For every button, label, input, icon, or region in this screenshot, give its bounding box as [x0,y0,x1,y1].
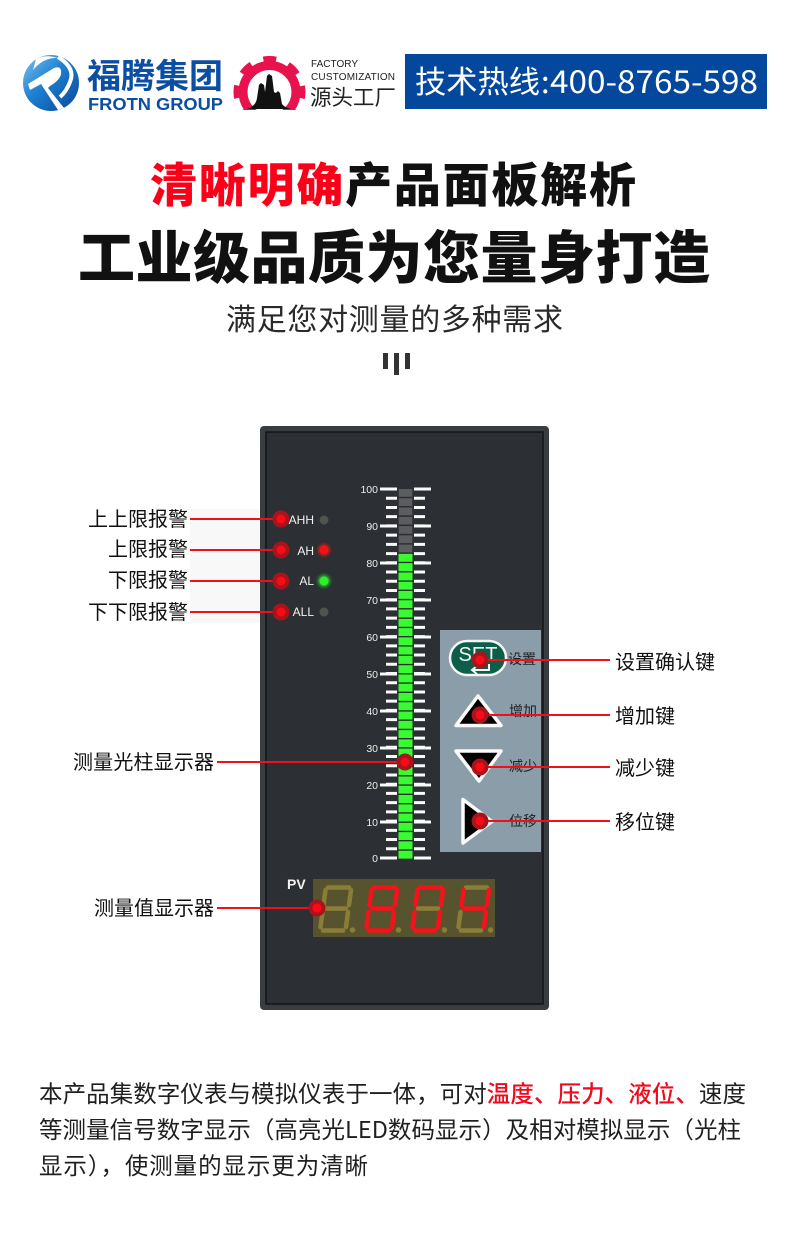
logo: source factory gear: CUSTOMIZATION [311,72,395,83]
alarm indicators: AH [297,544,314,558]
decorative marks [383,353,410,375]
callouts: left: 下限报警 [108,564,188,593]
logo english: FROTN GROUP [88,94,223,114]
digit 1 (unlit) [320,888,355,933]
bar chart: scale numbers: 10 [366,817,378,829]
key labels [508,649,537,831]
title line 2: 工业级品质为您量身打造 [78,213,710,295]
hotline banner [405,54,767,109]
key: down [456,751,501,781]
key: SET: SET [459,644,497,666]
bar chart: scale numbers: 100 [360,484,378,496]
logo: Frotn Group [23,49,223,114]
callouts: right: 增加键 [615,700,675,729]
callouts: left: 测量值显示器 [94,892,214,921]
description text: 本产品集数字仪表与模拟仪表于一体，可对温度、压力、液位、速度 [39,1075,746,1109]
callouts: right: 减少键 [615,752,675,781]
logo name: 福腾集团 [87,49,223,98]
bar chart: scale ticks [380,488,431,858]
hotline banner: 技术热线 [415,57,540,102]
key labels: 位移 [509,811,537,831]
callouts: left [73,503,414,921]
hotline banner: 400-8765-598 [550,57,758,102]
digit 3 [412,888,447,933]
bar chart: scale numbers: 80 [366,558,378,570]
key labels: 减少 [509,756,537,776]
logo: source factory gear [234,56,395,110]
subtitle: 满足您对测量的多种需求 [226,295,563,339]
bar chart: scale numbers [360,484,378,865]
key: shift [463,800,492,843]
bar chart: scale numbers: 20 [366,780,378,792]
digit 4 [458,888,493,933]
bar chart: scale numbers: 90 [366,521,378,533]
callouts: left: 测量光柱显示器 [73,746,214,775]
panel: key area [440,630,541,852]
digital display [313,879,495,937]
key labels: 增加 [509,701,537,721]
callouts: right [472,646,715,835]
title line 1: 清晰明确产品面板解析 [150,147,636,216]
callouts: right: 移位键 [615,806,675,835]
PV label: PV [287,876,306,892]
digit 2 [366,888,401,933]
callouts: right: 设置确认键 [615,646,715,675]
panel: instrument [260,426,549,1010]
key labels: 设置 [508,649,536,669]
callouts: left: 下下限报警 [88,596,188,625]
alarm indicators: ALL [293,605,314,619]
icon: R swoosh [23,55,79,111]
hotline banner: : [541,57,550,102]
description text [39,1075,746,1181]
alarm indicators: AHH [289,513,314,527]
bar chart: scale numbers: 70 [366,595,378,607]
callouts: left: 上限报警 [108,533,188,562]
alarm indicators [289,513,330,619]
bar chart: scale numbers: 0 [372,853,378,865]
bar chart: scale numbers: 50 [366,669,378,681]
label: factory customization: FACTORY [311,59,358,70]
description text: 等测量信号数字显示（高亮光LED数码显示）及相对模拟显示（光柱 [39,1111,741,1145]
bar chart: scale numbers: 30 [366,743,378,755]
bar chart: scale numbers: 40 [366,706,378,718]
alarm indicators: AL [299,574,314,588]
description text: 显示），使测量的显示更为清晰 [39,1147,368,1181]
label: source factory: 源头工厂 [310,81,396,112]
faint label backing [190,509,261,623]
bar chart: light column [399,489,412,860]
key: SET [450,641,506,675]
icon: gear [238,60,302,124]
bar chart: scale numbers: 60 [366,632,378,644]
callouts: left: 上上限报警 [88,503,188,532]
key: up [456,696,501,726]
